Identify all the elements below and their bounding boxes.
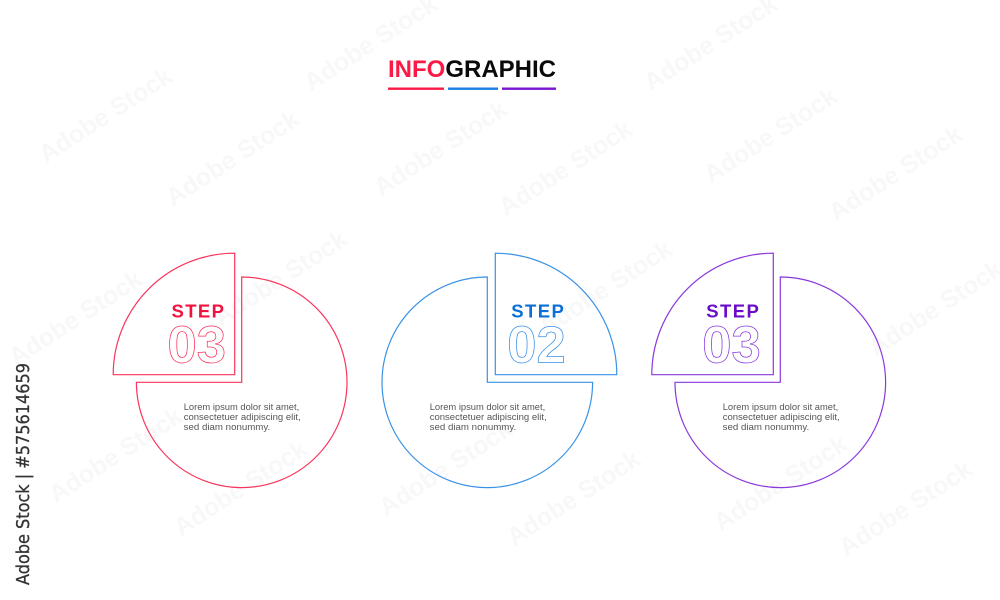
- step number: red: 03: [168, 316, 226, 374]
- pie body: blue: [382, 277, 593, 488]
- background watermark: Adobe Stock: [534, 235, 677, 342]
- background watermark: Adobe Stock: [374, 415, 517, 522]
- background watermark: Adobe Stock: [169, 435, 312, 542]
- background watermark: Adobe Stock: [699, 82, 842, 189]
- background watermark: Adobe Stock: [209, 225, 352, 332]
- stock id side label: Adobe Stock | #575614659: [14, 363, 34, 585]
- description: blue: sed diam nonummy.: [430, 422, 516, 433]
- background watermark: Adobe Stock: [34, 62, 177, 169]
- background watermark: Adobe Stock: [834, 455, 977, 562]
- description: red: consectetuer adipiscing elit,: [184, 412, 301, 423]
- background watermark: Adobe Stock: [709, 430, 852, 537]
- description: blue: [430, 402, 547, 433]
- panel: blue step 02: [382, 253, 617, 488]
- description: red: Lorem ipsum dolor sit amet,: [184, 402, 299, 413]
- background watermark: Adobe Stock: [44, 402, 187, 509]
- step label: purple: STEP: [706, 301, 759, 322]
- title: INFOGRAPHIC: [388, 56, 556, 83]
- background watermark: Adobe Stock: [824, 120, 967, 227]
- description: blue: Lorem ipsum dolor sit amet,: [430, 402, 545, 413]
- pie body: red: [136, 277, 347, 488]
- background watermark: Adobe Stock: [502, 445, 645, 552]
- pie slice: purple: [652, 253, 773, 375]
- description: purple: Lorem ipsum dolor sit amet,: [723, 402, 838, 413]
- pie body: purple: [675, 277, 886, 488]
- description: red: [184, 402, 301, 433]
- step label: red: STEP: [172, 301, 224, 322]
- pie slice: blue: [495, 253, 617, 375]
- description: blue: consectetuer adipiscing elit,: [430, 412, 547, 423]
- panel: red step 03: [113, 253, 347, 488]
- panel: purple step 03: [652, 253, 886, 488]
- step number: blue: 02: [507, 316, 566, 374]
- background watermark: Adobe Stock: [494, 115, 637, 222]
- background watermark: Adobe Stock: [4, 265, 147, 372]
- pie slice: red: [113, 253, 235, 375]
- background watermark: Adobe Stock: [369, 95, 512, 202]
- background watermark: Adobe Stock: [161, 105, 304, 212]
- step label: blue: STEP: [511, 301, 564, 322]
- description: purple: sed diam nonummy.: [723, 422, 809, 433]
- description: purple: [723, 402, 840, 433]
- description: purple: consectetuer adipiscing elit,: [723, 412, 840, 423]
- step number: purple: 03: [702, 316, 761, 374]
- description: red: sed diam nonummy.: [184, 422, 270, 433]
